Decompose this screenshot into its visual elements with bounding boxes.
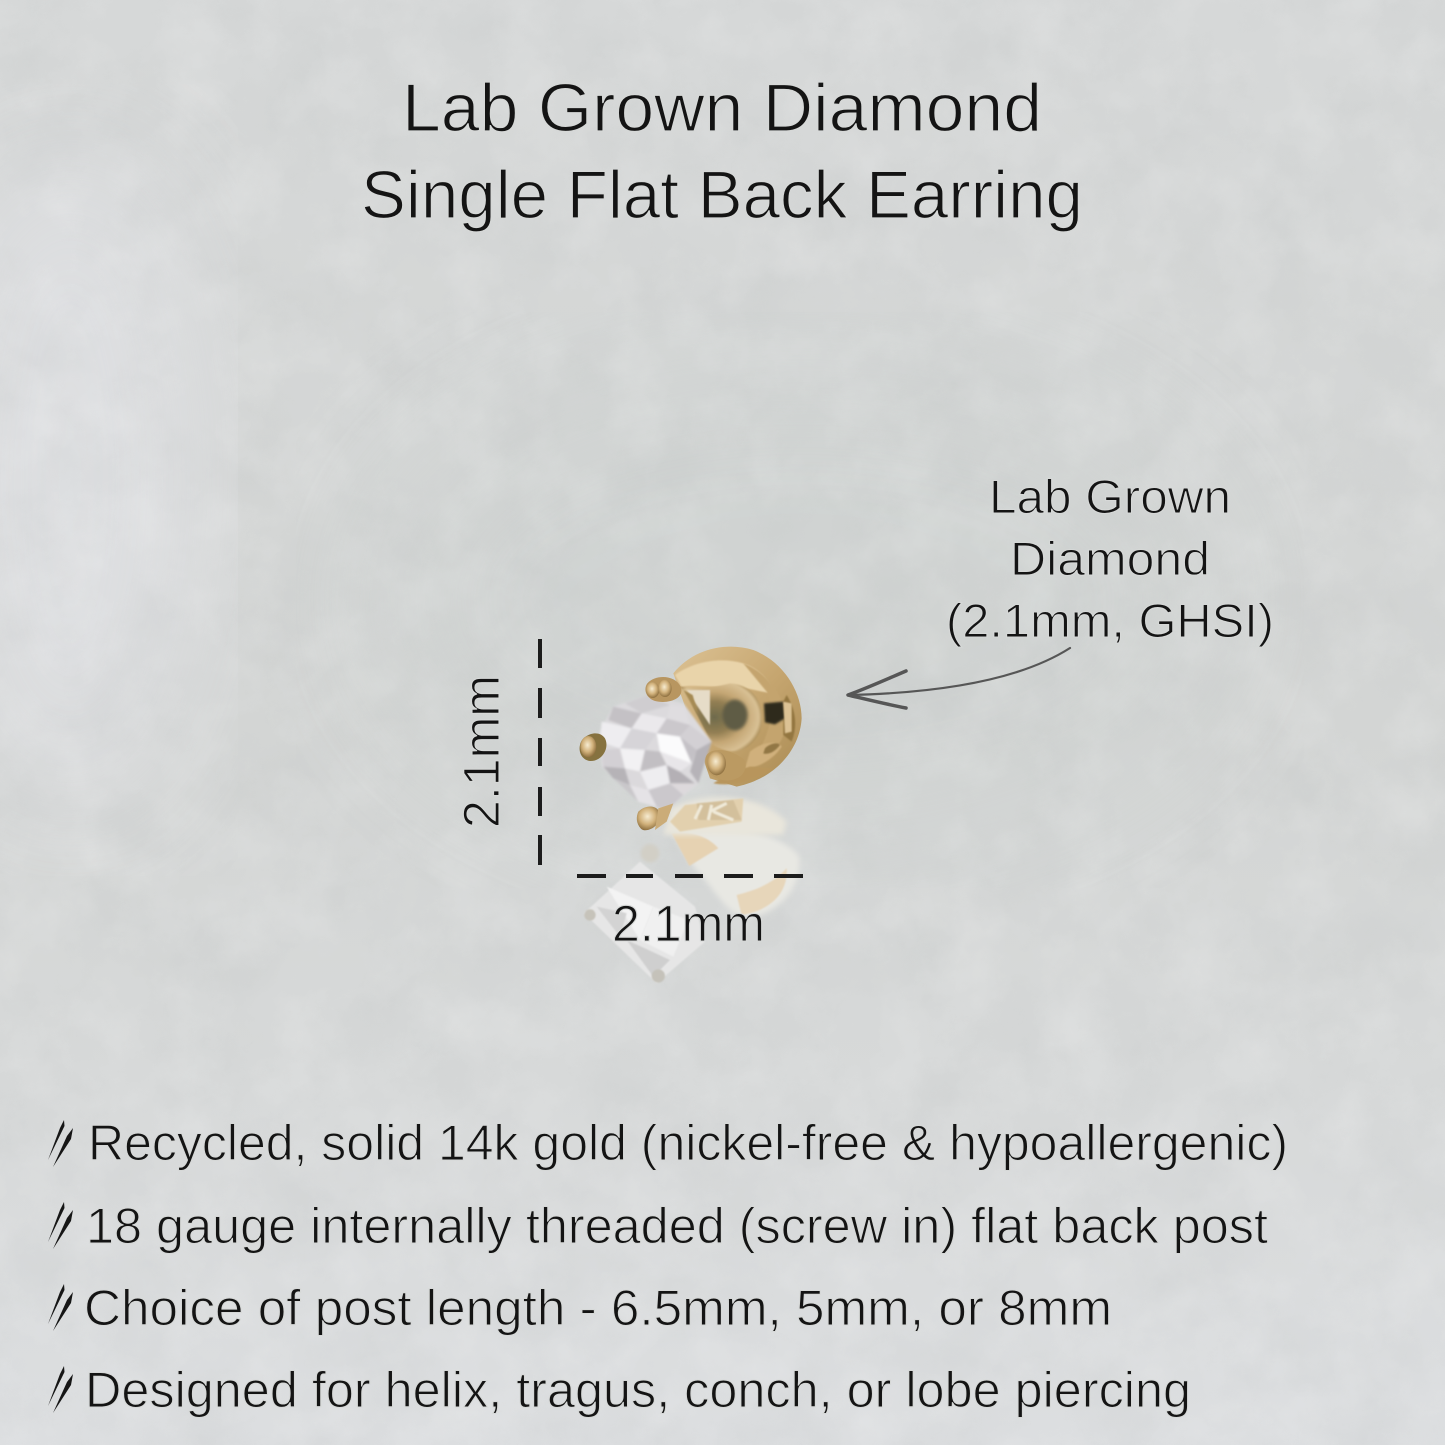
flat back disc (673, 647, 802, 787)
14K stamp area (670, 798, 743, 832)
bullet item: gauge and post: 18 gauge internally threaded (screw in) flat back post (86, 1198, 1268, 1254)
callout: lab grown diamond specification: (2.1mm, GHSI) (946, 594, 1274, 647)
prongs (580, 677, 746, 830)
photo: gold earring with lab grown diamond (580, 647, 802, 835)
title (361, 70, 1083, 233)
callout: lab grown diamond specification: Diamond (1010, 532, 1210, 585)
bright surface glow under earring (663, 797, 787, 835)
dimension: vertical 2.1mm: 2.1mm (453, 675, 510, 828)
threaded post (680, 683, 762, 751)
feature list (48, 1115, 1288, 1418)
bullet item: recycled gold: Recycled, solid 14k gold (nickel-free & hypoallergenic) (88, 1115, 1288, 1171)
photo: earring reflection (584, 828, 799, 983)
title: Single Flat Back Earring (361, 157, 1083, 233)
arrow: points from callout to earring (848, 648, 1070, 708)
bullet item: piercing types: Designed for helix, tragus, conch, or lobe piercing (85, 1362, 1191, 1418)
callout: lab grown diamond specification (946, 470, 1274, 647)
bullet item: post length: Choice of post length - 6.5mm, 5mm, or 8mm (84, 1280, 1112, 1336)
diamond (599, 695, 712, 810)
dimension: horizontal 2.1mm: 2.1mm (612, 895, 765, 952)
title: Lab Grown Diamond (402, 70, 1042, 146)
callout: lab grown diamond specification: Lab Grown (989, 470, 1231, 523)
